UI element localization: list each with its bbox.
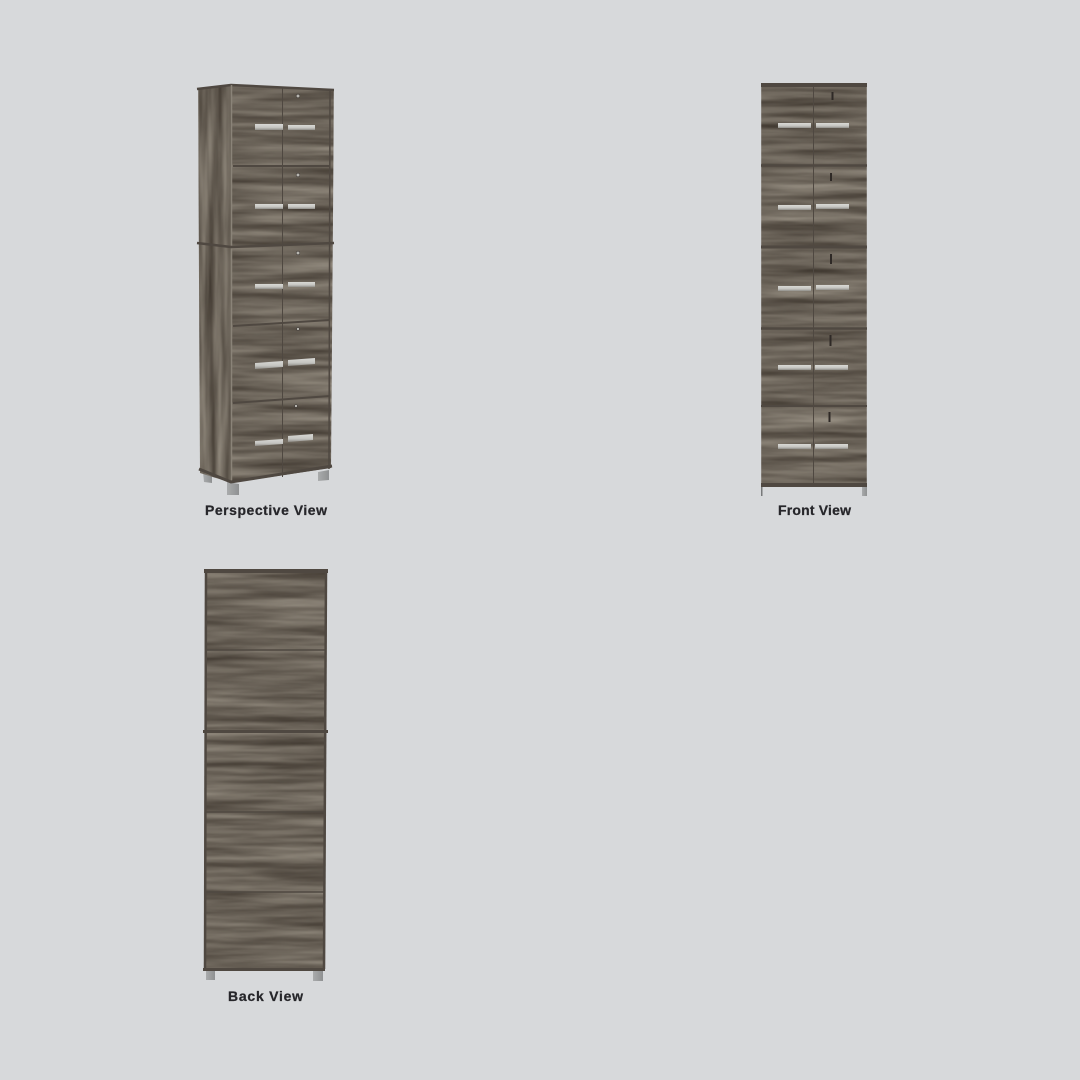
keys: [830, 92, 832, 422]
legs: [203, 470, 329, 495]
product: perspective view cabinet: [197, 85, 334, 495]
top and frame edges: [197, 85, 334, 483]
handles: [255, 124, 315, 446]
caption: front view: Front View: [778, 502, 851, 518]
frame and seams: [203, 571, 328, 970]
cabinet body: [761, 83, 867, 487]
product: back view cabinet: [203, 570, 328, 981]
side panel: [198, 85, 232, 483]
frame and door seams: [761, 85, 867, 485]
product: front view cabinet: [761, 83, 867, 496]
handles: [778, 123, 849, 449]
legs: [206, 970, 323, 981]
back panel: [204, 570, 327, 970]
key locks: [294, 94, 300, 407]
legs: [761, 486, 867, 496]
front face: [231, 85, 334, 483]
caption: back view: Back View: [228, 988, 303, 1004]
caption: perspective view: Perspective View: [205, 502, 327, 518]
